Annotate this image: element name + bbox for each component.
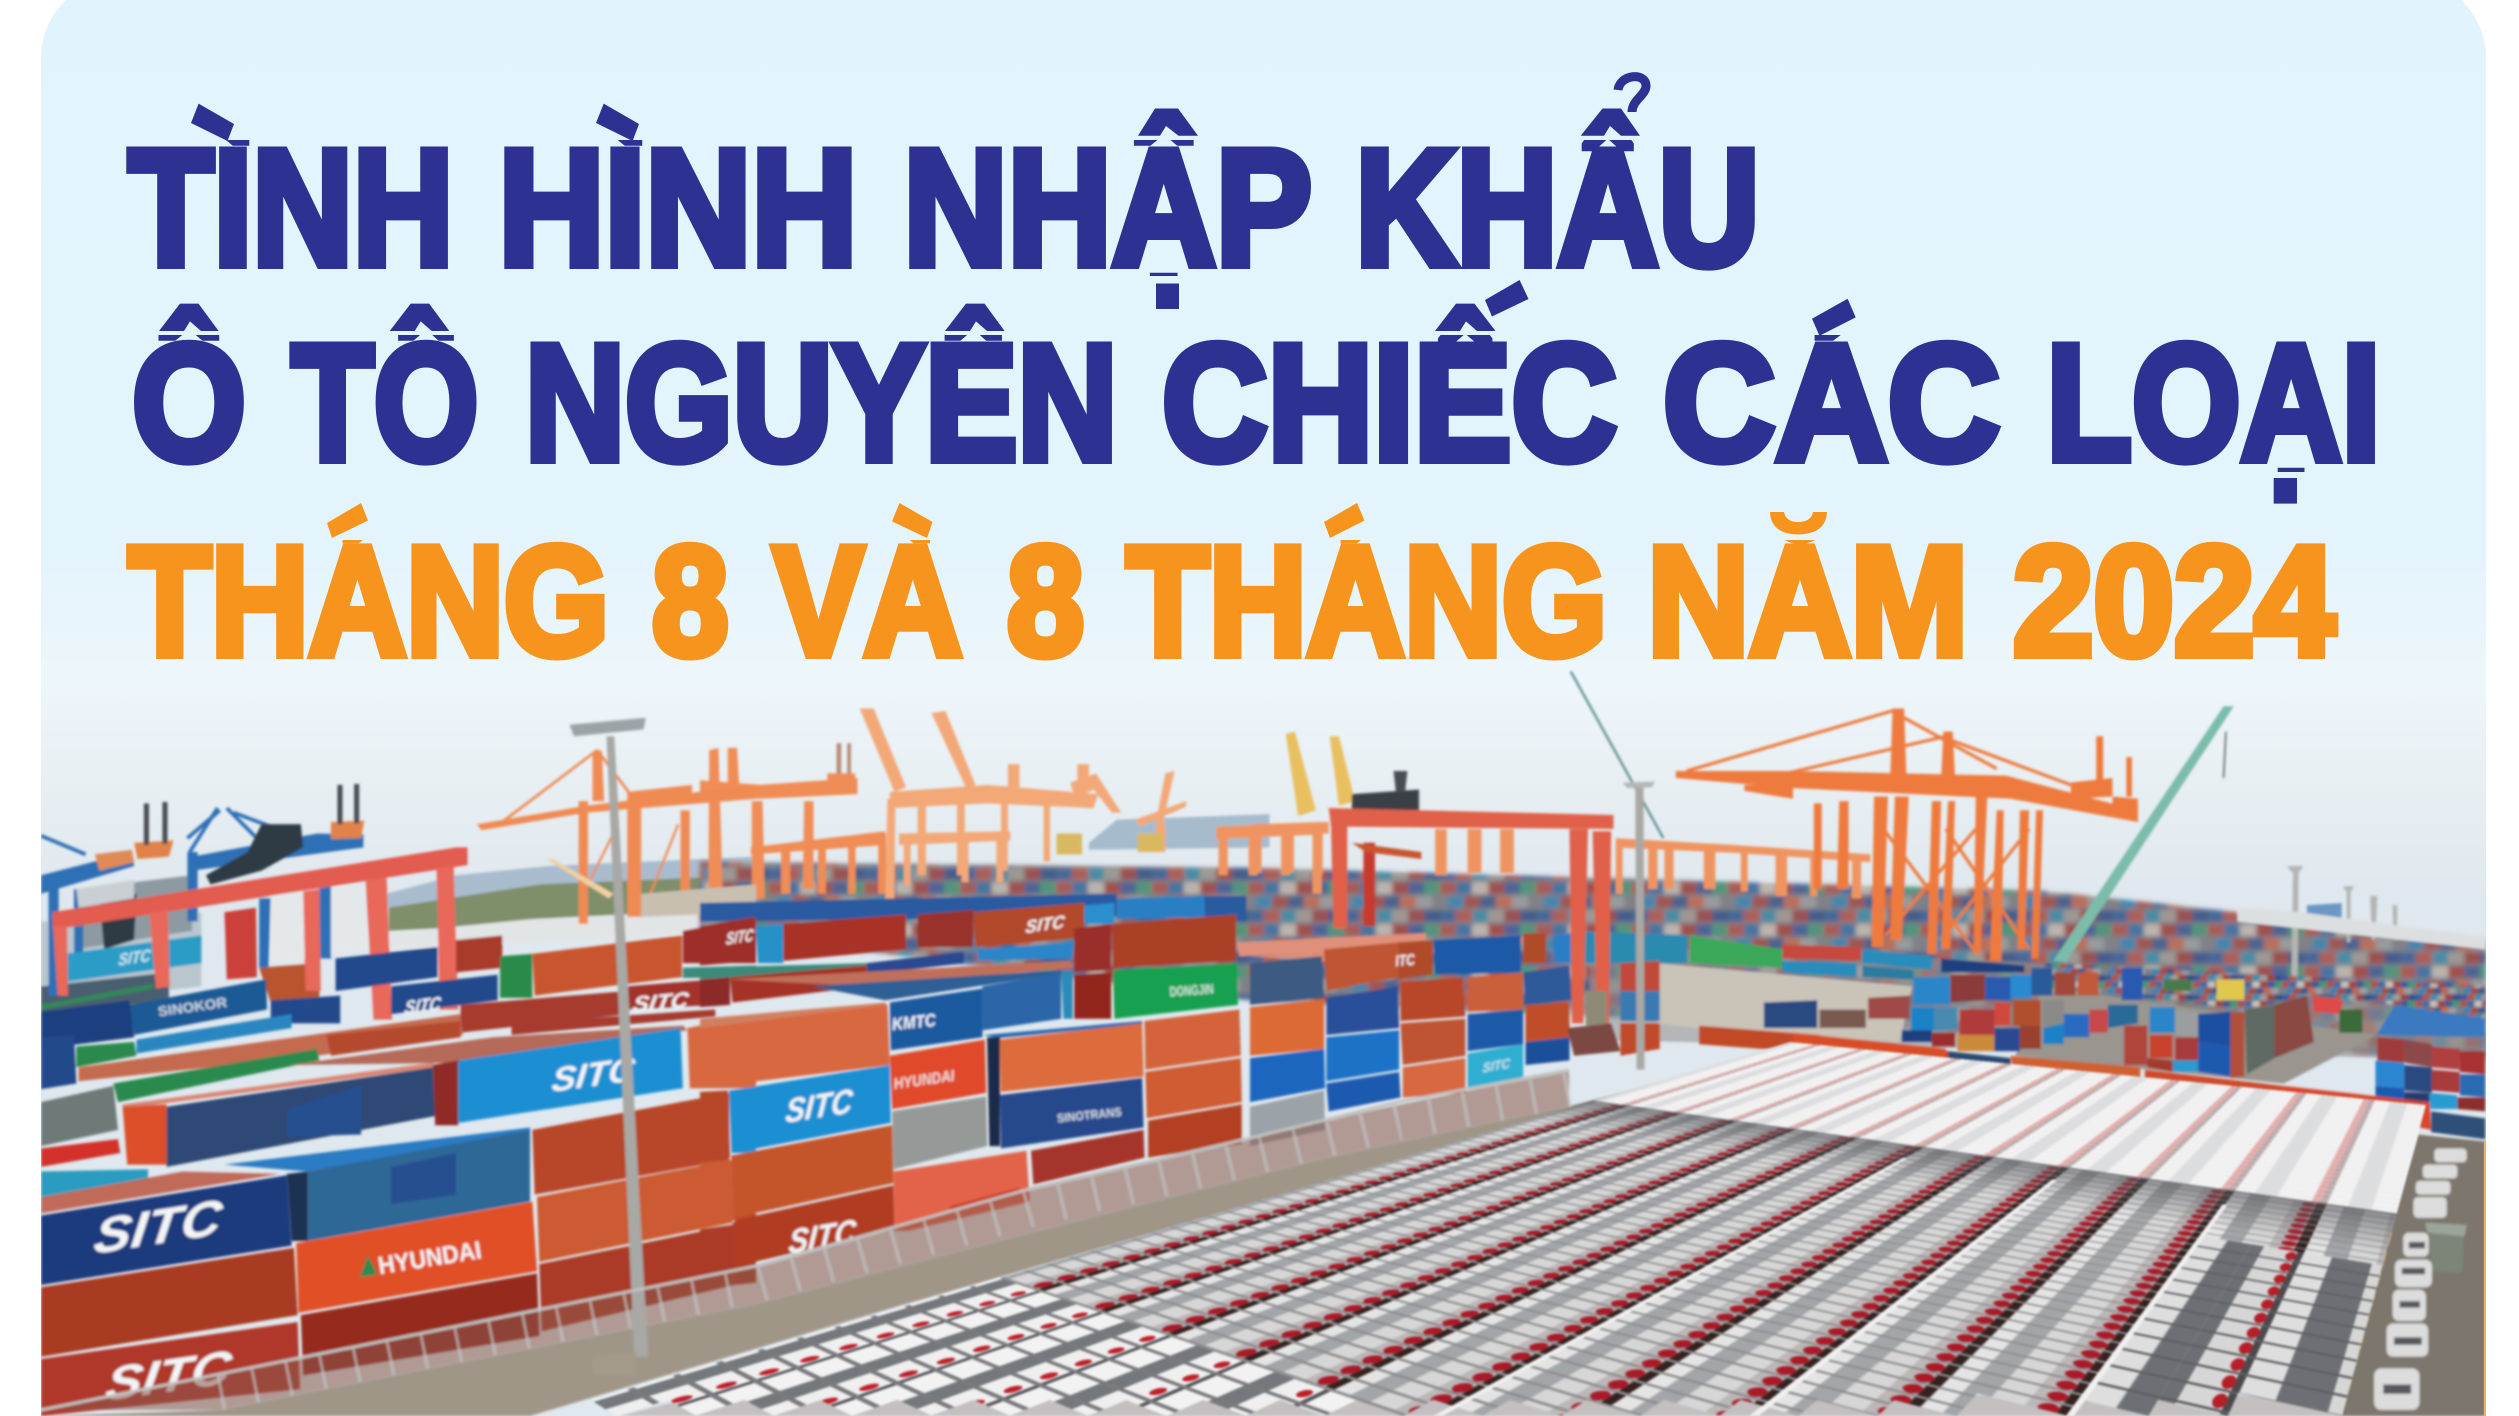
subtitle: THÁNG 8 VÀ 8 THÁNG NĂM 2024: VÀ: [773, 514, 962, 688]
left container stacks: SITC: [103, 1341, 236, 1412]
subtitle: THÁNG 8 VÀ 8 THÁNG NĂM 2024: 8: [1007, 514, 1084, 688]
left container stacks: SINOKOR: [157, 994, 228, 1019]
security fence: [41, 1070, 1569, 1410]
left container stacks: SITC: [631, 987, 691, 1017]
white cars in the foreground: [593, 1277, 1356, 1416]
white walkways between rows: [1434, 1156, 2228, 1416]
blue cranes and red gantry on the left: [41, 784, 468, 1020]
left container stacks: SITC: [404, 993, 442, 1018]
central container stacks: SITC: [784, 1082, 855, 1131]
thin orange edge line at the right of the photo: [2484, 1141, 2486, 1416]
port photo illustration: [41, 671, 2486, 1416]
orange crane beyond the lamp post: [477, 750, 756, 924]
title line 2: Ô TÔ NGUYÊN CHIẾC CÁC LOẠI: NGUYÊN: [525, 310, 1118, 494]
near cars, right rows: [1433, 1144, 2397, 1416]
central container stacks: SINOTRANS: [1056, 1105, 1122, 1125]
subtitle: THÁNG 8 VÀ 8 THÁNG NĂM 2024: THÁNG: [1126, 514, 1607, 688]
title line 2: Ô TÔ NGUYÊN CHIẾC CÁC LOẠI: LOẠI: [2046, 310, 2380, 494]
central container stacks: KMTC: [891, 1010, 937, 1034]
central container stacks: SITC: [725, 926, 755, 949]
title line 1: TÌNH HÌNH NHẬP KHẨU: TÌNH: [128, 116, 454, 300]
subtitle: THÁNG 8 VÀ 8 THÁNG NĂM 2024: NĂM: [1648, 514, 1968, 688]
central container stacks: DONGJIN: [1169, 980, 1214, 1000]
central container stacks: HYUNDAI: [893, 1068, 956, 1093]
title line 2: Ô TÔ NGUYÊN CHIẾC CÁC LOẠI: Ô: [132, 310, 246, 494]
navy tone marks of the title: [159, 77, 2297, 504]
subtitle: THÁNG 8 VÀ 8 THÁNG NĂM 2024: 8: [652, 514, 728, 688]
orange tone marks of the subtitle: [327, 503, 1827, 538]
title line 1: TÌNH HÌNH NHẬP KHẨU: KHẨU: [1356, 116, 1760, 300]
title line 1: TÌNH HÌNH NHẬP KHẨU: HÌNH: [498, 116, 858, 300]
grey shaded section of rows: [1527, 1101, 2397, 1255]
left container stacks: SITC: [726, 925, 757, 949]
title line 1: TÌNH HÌNH NHẬP KHẨU: NHẬP: [904, 116, 1312, 300]
title line 2: Ô TÔ NGUYÊN CHIẾC CÁC LOẠI: CÁC: [1663, 310, 2000, 494]
left container stacks: SITC: [550, 1050, 637, 1100]
right gantry and right-of-centre container stacks: ITC: [1395, 952, 1416, 970]
car parking field in perspective: [593, 1040, 2428, 1416]
left container stacks: [41, 917, 757, 1416]
subtitle: THÁNG 8 VÀ 8 THÁNG NĂM 2024: [126, 540, 2338, 660]
distant hills and marsh: [41, 857, 756, 1005]
pavement along the container fence: [41, 1050, 1840, 1416]
subtitle: THÁNG 8 VÀ 8 THÁNG NĂM 2024: THÁNG: [128, 514, 609, 688]
lamp post: [569, 718, 648, 1375]
title line 1: TÌNH HÌNH NHẬP KHẨU: [126, 140, 1755, 276]
central container stacks: SITC: [1025, 911, 1067, 937]
containers seen through the fence: [41, 1070, 1569, 1410]
low orange gantries behind yard: [1250, 822, 1870, 898]
right gantry and right-of-centre container stacks: SITC: [1482, 1055, 1511, 1075]
title line 2: Ô TÔ NGUYÊN CHIẾC CÁC LOẠI: TÔ: [292, 310, 478, 494]
title line 2: Ô TÔ NGUYÊN CHIẾC CÁC LOẠI: [134, 335, 2375, 472]
left container stacks: HYUNDAI: [376, 1236, 483, 1280]
dark cars on the right rows: [2085, 1237, 2384, 1416]
subtitle: THÁNG 8 VÀ 8 THÁNG NĂM 2024: 2024: [2013, 514, 2335, 688]
light band under the foreground cars: [620, 1395, 2342, 1416]
right gantry and right-of-centre container stacks: [1250, 771, 1949, 1146]
central container stacks: [700, 894, 1426, 1287]
far container yard: [700, 862, 2486, 1060]
blue cranes and red gantry on the left: SITC: [118, 946, 152, 970]
far orange cranes: [700, 709, 1355, 910]
title line 2: Ô TÔ NGUYÊN CHIẾC CÁC LOẠI: CHIẾC: [1162, 310, 1617, 494]
far white car block: [1594, 1042, 2426, 1213]
central container stacks: SITC: [787, 1212, 858, 1262]
big orange quay crane and green crawler crane: [1571, 671, 2485, 986]
far right container stacks: [1793, 949, 2485, 1416]
near cars with red tails, left rows: [1000, 1101, 1910, 1416]
left container stacks: SITC: [91, 1188, 227, 1265]
